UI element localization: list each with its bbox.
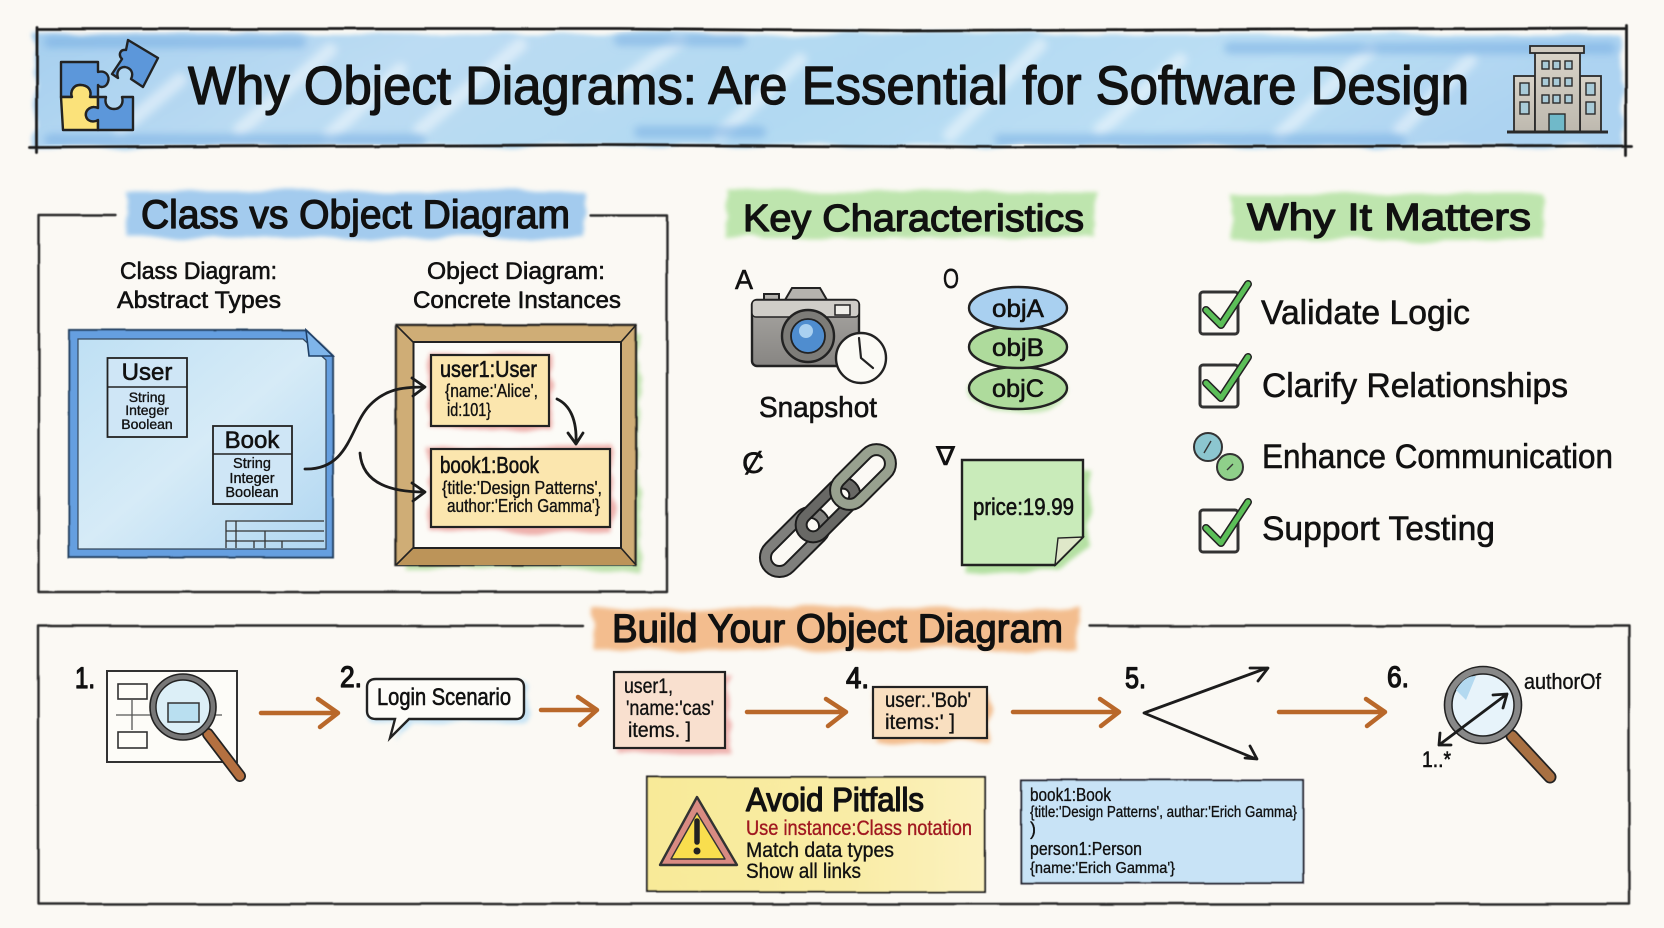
step 3 box: 'name:'cas'	[626, 697, 714, 720]
marker O: O	[943, 263, 959, 294]
object stack ellipses: objC	[992, 375, 1044, 403]
heading wash: build	[592, 608, 1078, 650]
sticky note: price: price:19.99	[973, 494, 1074, 521]
blueprint title block	[226, 521, 324, 548]
label: object diagram: Concrete Instances	[413, 287, 621, 314]
step 2 speech bubble	[367, 679, 528, 742]
marker C: Ȼ	[742, 447, 764, 480]
object box: user1: user1:User	[440, 356, 537, 382]
step 6 icon: magnifier with link	[1439, 666, 1550, 777]
step 5 diverging arrows	[1144, 668, 1268, 759]
class box: user: User	[122, 359, 172, 386]
icon: puzzle pieces	[61, 40, 158, 130]
icon: warning triangle	[660, 797, 737, 865]
object box: user1: id:101}	[447, 400, 491, 420]
item: support testing: Support Testing	[1262, 510, 1495, 548]
icon: office building	[1507, 46, 1608, 132]
class box: book: Book	[225, 427, 280, 454]
step 1 number: 1.	[75, 662, 95, 695]
object box: user1	[429, 353, 552, 429]
code box: book and person objects: )	[1030, 819, 1036, 839]
arrow: step 2 to 3	[541, 697, 597, 725]
header banner	[30, 25, 1632, 155]
heading: why it matters: Why It Matters	[1247, 197, 1531, 239]
object box: book1: author:'Erich Gamma'}	[447, 496, 600, 516]
callout: avoid pitfalls: Match data types	[746, 839, 894, 862]
title: Why Object Diagrams: Are Essential for Software Design	[188, 56, 1469, 116]
arrow: step 3 to 4	[747, 699, 846, 726]
object box: book1: {title:'Design Patterns',	[442, 478, 602, 498]
panel: class vs object diagram	[39, 192, 667, 592]
item: enhance communication: Enhance Communication	[1262, 438, 1613, 476]
step 2 number: 2.	[340, 661, 362, 694]
heading: class vs object diagram: Class vs Object Diagram	[141, 193, 570, 237]
marker A: A	[735, 264, 753, 295]
class box: user	[107, 358, 187, 437]
heading: key characteristics: Key Characteristics	[743, 198, 1084, 240]
label: multiplicity: 1..*	[1422, 747, 1451, 772]
object box: book1: book1:Book	[440, 452, 539, 478]
panel frame	[38, 626, 1629, 904]
object box: user1: {name:'Alice',	[445, 381, 538, 401]
step 4 box: items:' ]	[885, 711, 955, 734]
class box: book: Integer	[229, 471, 275, 487]
panel: key characteristics	[726, 192, 1094, 577]
callout: avoid pitfalls: Use instance:Class notation	[746, 817, 972, 840]
code box: book and person objects: book1:Book	[1030, 785, 1112, 805]
panel: why it matters	[1194, 194, 1613, 552]
step 3 box: items. ]	[628, 719, 691, 742]
class box: user: Integer	[125, 402, 169, 418]
item: support testing	[1200, 502, 1495, 552]
object box: book1	[429, 447, 613, 531]
label: object diagram: Object Diagram:	[427, 258, 605, 285]
item: enhance communication	[1194, 433, 1613, 480]
code box: book and person objects	[1021, 780, 1303, 883]
arrow: class to user1	[305, 378, 425, 469]
step 1 icon: magnifier over diagram	[107, 671, 240, 776]
step 3 box	[614, 672, 730, 754]
heading: build your object diagram: Build Your Object Diagram	[612, 607, 1063, 651]
arrow: step 1 to 2	[261, 699, 338, 727]
step 4 box: user:.'Bob'	[885, 689, 971, 712]
label: class diagram: Class Diagram:	[120, 258, 277, 285]
class box: book	[213, 426, 292, 504]
step 2 speech bubble: Login Scenario	[377, 684, 511, 711]
item: clarify relationships: Clarify Relationships	[1262, 367, 1568, 405]
heading wash: why it matters	[1232, 194, 1543, 240]
callout: avoid pitfalls: Show all links	[746, 860, 861, 883]
step 5 number: 5.	[1125, 662, 1146, 695]
icon: chain links	[760, 444, 896, 577]
step 4 number: 4.	[846, 662, 869, 695]
callout: avoid pitfalls: Avoid Pitfalls	[746, 781, 924, 818]
object stack ellipses: objB	[992, 334, 1044, 362]
class box: book: Boolean	[225, 485, 279, 501]
item: validate logic	[1200, 284, 1470, 334]
label: snapshot: Snapshot	[759, 392, 877, 424]
callout: avoid pitfalls	[647, 777, 985, 892]
class box: book: String	[233, 456, 271, 472]
code box: book and person objects: {title:'Design Patterns', authar:'Erich Gamma}	[1030, 804, 1298, 821]
wooden picture frame	[396, 325, 640, 570]
arrow: class to book1	[360, 453, 425, 501]
arrow: step 5 to 6	[1279, 699, 1385, 726]
heading wash: key characteristics	[726, 192, 1094, 238]
icon: camera with clock	[752, 288, 886, 383]
item: validate logic: Validate Logic	[1261, 294, 1470, 332]
code box: book and person objects: {name:'Erich Gamma'}	[1030, 860, 1176, 877]
arrow: step 4 to 5	[1013, 699, 1119, 726]
code box: book and person objects: person1:Person	[1030, 839, 1142, 859]
class box: user: Boolean	[121, 416, 173, 432]
class box: user: String	[129, 389, 165, 405]
blueprint document	[69, 330, 333, 557]
sticky note: price	[962, 460, 1090, 572]
label: object diagram	[413, 258, 621, 314]
step 3 box: user1,	[624, 675, 673, 698]
object stack ellipses	[968, 287, 1068, 412]
panel frame	[39, 215, 667, 592]
step 6 number: 6.	[1387, 661, 1409, 694]
marker nabla: ∇	[935, 441, 956, 471]
arrow: user1 to book1	[557, 399, 583, 444]
label: class diagram: Abstract Types	[117, 287, 281, 314]
object stack ellipses: objA	[992, 295, 1044, 323]
label: class diagram	[117, 258, 281, 314]
step 4 box	[873, 687, 990, 742]
item: clarify relationships	[1200, 357, 1568, 407]
label: authorOf: authorOf	[1524, 669, 1602, 694]
heading wash: class vs object	[126, 192, 584, 238]
panel: build your object diagram	[38, 607, 1629, 904]
